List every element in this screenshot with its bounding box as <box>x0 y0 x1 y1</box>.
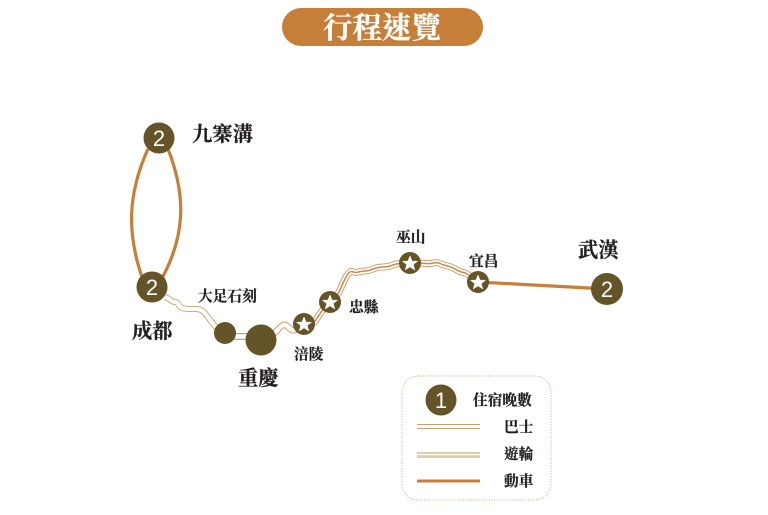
stop: Wuhan <box>578 239 623 305</box>
stop: Yichang <box>467 253 498 293</box>
stop: Wushan: 巫山 <box>396 229 425 246</box>
stop: Fuling: 涪陵 <box>294 345 324 363</box>
stop: Jiuzhaigou: 2 <box>153 126 165 151</box>
train route: Chengdu to Jiuzhaigou loop <box>132 149 181 280</box>
stop: Wushan <box>396 229 425 274</box>
stop: Jiuzhaigou <box>144 122 253 154</box>
stop: Zhongxian <box>319 291 380 316</box>
legend: train <box>417 472 534 490</box>
legend: cruise <box>417 445 534 463</box>
bus route: Chengdu to Dazu <box>165 297 225 333</box>
stop: Dazu Rock Carvings <box>198 287 257 344</box>
stop: Dazu Rock Carvings: 大足石刻 <box>198 287 257 305</box>
bus route: Dazu to Chongqing <box>230 333 260 340</box>
bus route: Chongqing to Fuling <box>268 324 304 338</box>
title <box>282 8 483 46</box>
train route: Yichang to Wuhan <box>478 282 607 289</box>
cruise route: Fuling to Yichang <box>304 263 478 325</box>
legend: nights stayed: 1 <box>435 388 447 413</box>
stop: Chengdu: 2 <box>146 275 158 300</box>
stop: Fuling <box>293 313 324 363</box>
stop: Zhongxian: 忠縣 <box>349 298 380 316</box>
stop: Wuhan: 2 <box>601 277 613 302</box>
stop: Wuhan: 武漢 <box>578 239 619 262</box>
legend: nights stayed <box>426 384 532 416</box>
stop: Chengdu <box>132 272 173 343</box>
stop: Chengdu: 成都 <box>132 320 173 343</box>
legend: bus <box>417 419 534 436</box>
stop: Jiuzhaigou: 九寨溝 <box>192 122 253 146</box>
legend <box>402 376 551 500</box>
legend: cruise: 遊輪 <box>504 445 534 463</box>
stop: Yichang: 宜昌 <box>469 253 498 270</box>
legend: bus: 巴士 <box>504 419 534 436</box>
legend: nights stayed: 住宿晚數 <box>473 391 532 409</box>
stop: Chongqing <box>238 324 279 390</box>
stop: Chongqing: 重慶 <box>238 366 279 390</box>
legend: train: 動車 <box>504 472 534 490</box>
title: 行程速覽 <box>323 12 441 45</box>
